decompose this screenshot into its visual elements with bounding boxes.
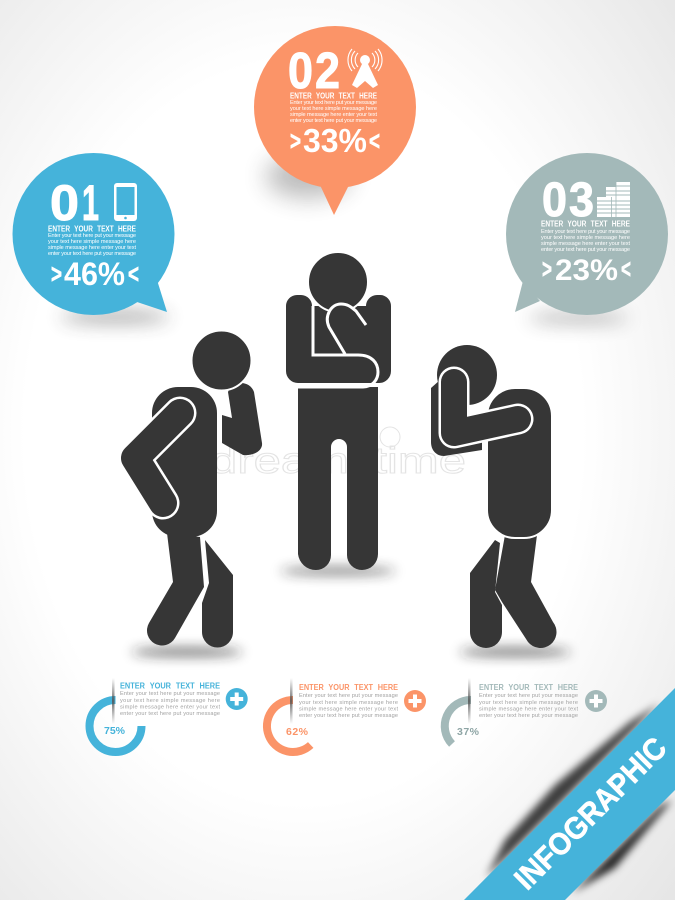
body text: simple message here enter your text <box>120 704 220 710</box>
heading: ENTER YOUR TEXT HERE <box>290 92 378 100</box>
back arm <box>222 383 262 455</box>
back leg <box>470 540 502 648</box>
ribbon <box>464 688 675 900</box>
icon: plus <box>585 690 607 712</box>
panel: stat 62% <box>267 678 426 752</box>
bubble circle <box>254 26 416 188</box>
head <box>308 252 368 312</box>
watermark <box>210 427 466 481</box>
legs <box>298 387 378 570</box>
percentage: > <box>51 259 62 289</box>
figure: left person <box>135 330 262 648</box>
body text: Enter your text here put your message <box>541 229 630 235</box>
percentage: > <box>542 254 552 284</box>
body text: enter your text here put your message <box>299 713 398 719</box>
body text: your text here simple message here <box>541 235 630 241</box>
body text: enter your text here put your message <box>541 247 630 253</box>
heading: ENTER YOUR TEXT HERE <box>120 682 221 690</box>
bubble circle <box>506 153 668 315</box>
panel: bubble 01 <box>12 153 174 323</box>
percentage: > <box>290 126 301 156</box>
heading: ENTER YOUR TEXT HERE <box>479 683 579 692</box>
percent label: 62% <box>286 726 309 738</box>
back leg <box>202 540 233 648</box>
donut arc <box>90 700 142 752</box>
ribbon band <box>464 688 675 900</box>
body text: your text here simple message here <box>299 700 398 706</box>
body text <box>299 693 398 719</box>
heading: ENTER YOUR TEXT HERE <box>299 683 399 692</box>
body text: simple message here enter your text <box>48 245 136 251</box>
bubble shadow <box>60 311 170 323</box>
panel: stat 37% <box>445 678 607 744</box>
bubble tail <box>320 185 349 215</box>
number: 0 <box>50 175 79 231</box>
ribbon shadows <box>486 703 672 893</box>
number: 0 <box>288 42 313 99</box>
body text: enter your text here put your message <box>48 251 136 257</box>
body text: Enter your text here put your message <box>290 100 377 106</box>
back arm <box>431 380 482 456</box>
number: 0 <box>542 174 567 227</box>
percentage: 33% <box>303 122 367 159</box>
front leg <box>495 535 556 648</box>
donut arc <box>267 700 311 752</box>
body text: your text here simple message here <box>120 698 220 704</box>
body text: enter your text here put your message <box>479 713 578 719</box>
divider <box>112 678 114 724</box>
percentage: 23% <box>555 254 618 287</box>
front arm <box>135 413 180 503</box>
head <box>437 345 497 405</box>
watermark: dreamstime <box>210 440 466 481</box>
body text: your text here simple message here <box>290 106 377 112</box>
body text: your text here simple message here <box>48 239 136 245</box>
body text <box>479 693 578 719</box>
front leg <box>147 533 204 645</box>
body text: Enter your text here put your message <box>479 693 578 699</box>
body text: Enter your text here put your message <box>120 691 220 697</box>
head <box>192 330 252 390</box>
body text: simple message here enter your text <box>541 241 630 247</box>
divider <box>290 678 292 724</box>
divider <box>468 678 470 724</box>
percentage <box>542 254 631 287</box>
percent label: 37% <box>457 726 480 738</box>
number: 3 <box>569 174 594 227</box>
floor shadows <box>131 567 571 656</box>
arms and chest <box>286 295 391 383</box>
icon: radio tower <box>348 49 382 88</box>
panel: bubble 02 <box>254 26 416 215</box>
torso <box>152 387 217 537</box>
number <box>542 174 594 227</box>
figure: middle person <box>286 252 391 570</box>
percentage: < <box>621 254 631 284</box>
bubble shadow <box>266 154 350 198</box>
body text <box>120 691 220 717</box>
percentage: 46% <box>64 256 125 292</box>
percent label: 75% <box>104 725 126 737</box>
panel: stat 75% <box>90 678 248 752</box>
body text: enter your text here put your message <box>290 118 377 124</box>
donut arc <box>445 700 471 744</box>
number <box>50 175 99 231</box>
number: 2 <box>315 42 340 99</box>
figure: right person <box>431 345 556 648</box>
icon: plus <box>404 690 426 712</box>
bubble circle <box>12 153 174 315</box>
hand outline <box>327 304 366 354</box>
body text: Enter your text here put your message <box>48 233 136 239</box>
body text <box>48 233 136 257</box>
body text: your text here simple message here <box>479 700 578 706</box>
bubble tail <box>515 281 540 312</box>
crossed arm outline <box>298 306 378 387</box>
heading: ENTER YOUR TEXT HERE <box>48 224 137 234</box>
front arm <box>454 382 518 433</box>
body text <box>290 100 377 124</box>
body text <box>541 229 630 253</box>
body text: Enter your text here put your message <box>299 693 398 699</box>
body text: simple message here enter your text <box>290 112 377 118</box>
percentage: < <box>369 126 380 156</box>
number: 1 <box>82 175 99 231</box>
panel: bubble 03 <box>506 153 668 324</box>
percentage: < <box>128 259 139 289</box>
body text: enter your text here put your message <box>120 711 220 717</box>
torso <box>487 388 552 538</box>
body text: simple message here enter your text <box>299 706 398 712</box>
body text: simple message here enter your text <box>479 706 578 712</box>
heading: ENTER YOUR TEXT HERE <box>541 220 631 228</box>
icon: buildings <box>597 182 630 217</box>
number <box>288 42 340 99</box>
icon: plus <box>226 688 248 710</box>
bubble shadow <box>528 312 628 324</box>
icon: phone <box>114 183 137 221</box>
bubble tail <box>134 280 167 312</box>
